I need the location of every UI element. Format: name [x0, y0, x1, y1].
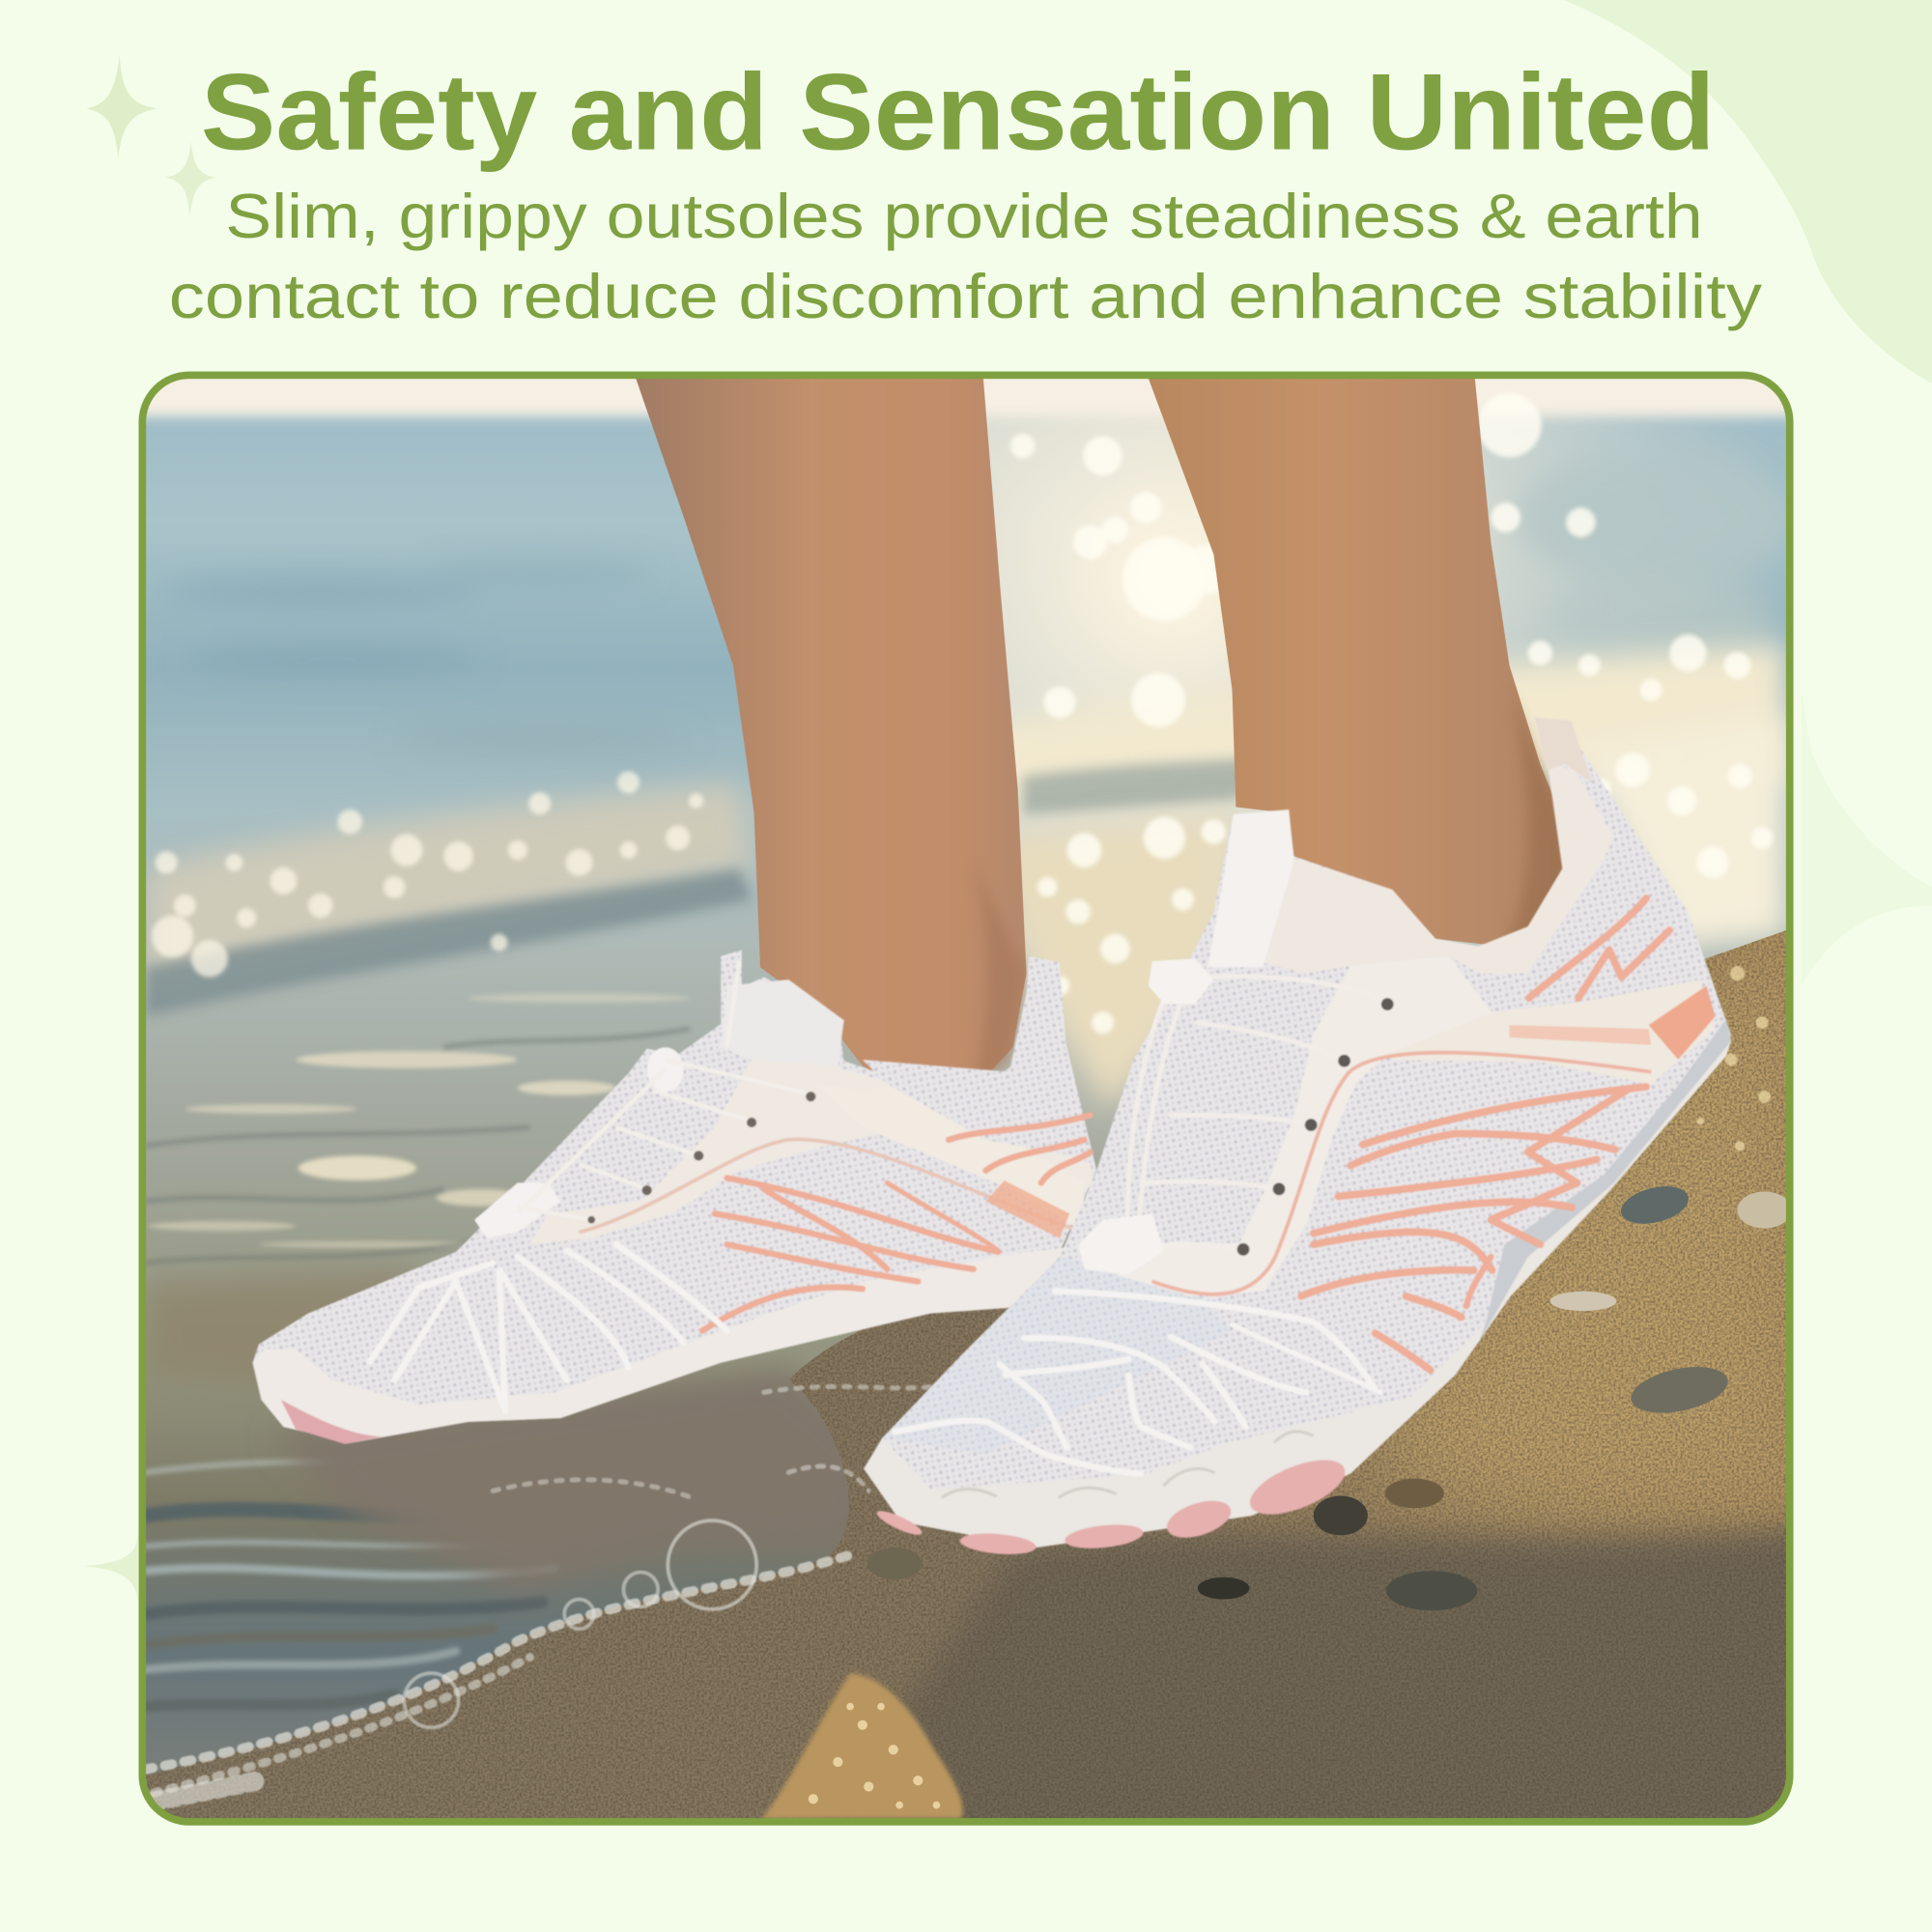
left shoe upper	[252, 950, 1096, 1443]
right shoe toe tint	[882, 1257, 1233, 1454]
right leg ankle shadow	[1503, 690, 1575, 947]
shallow water highlights	[148, 993, 690, 1248]
bright sand on the right	[1355, 936, 1786, 1509]
subtitle: Slim, grippy outsoles provide steadiness & earth	[225, 181, 1703, 251]
right shoe pink trim line	[1152, 1053, 1651, 1294]
pebbles	[867, 1179, 1792, 1610]
right shoe upper	[864, 727, 1731, 1548]
left shoe toggle and laces	[474, 961, 815, 1238]
right shoe rear pull tab	[1534, 717, 1592, 782]
right shoe white toe ribs	[895, 1292, 1380, 1474]
foreground water streaks	[146, 1454, 579, 1707]
right shoe pink heel wedge	[1649, 985, 1716, 1060]
sand grain texture	[146, 924, 1786, 1824]
left leg ankle shadow	[974, 863, 1026, 1091]
left shoe pink ribs	[702, 1115, 1091, 1331]
dark ripple lines in shallows	[146, 1029, 690, 1263]
right shoe grey sidewall	[1479, 1019, 1731, 1343]
sparkle large	[86, 55, 157, 157]
golden sun patch on sand	[761, 1673, 963, 1819]
sand glitter on the right	[1696, 966, 1771, 1151]
sparkle small	[165, 142, 215, 215]
left breaking wave	[146, 771, 754, 1016]
right shoe eyelets	[1237, 998, 1394, 1256]
sand shadow	[788, 1521, 1848, 1873]
sky	[111, 345, 1836, 416]
water ripples	[160, 450, 1786, 750]
right shoe toe bumper ridges	[943, 1432, 1312, 1497]
sparkle behind photo	[84, 1528, 138, 1602]
left shoe toe pad	[281, 1400, 382, 1444]
left shoe white toe ribs	[370, 1244, 727, 1410]
decorative corner blob	[1564, 0, 1932, 384]
decorative lower right blob	[1802, 690, 1932, 985]
photo frame border	[142, 375, 1790, 1822]
left leg	[636, 379, 1026, 1096]
shoe: front right shoe	[864, 717, 1731, 1557]
right shoe laces	[1127, 977, 1387, 1249]
subtitle	[169, 181, 1763, 331]
right leg	[1149, 379, 1575, 947]
subtitle: contact to reduce discomfort and enhance stability	[169, 261, 1763, 331]
left shoe sole	[252, 1247, 1069, 1443]
wet shoreline tint	[146, 1269, 419, 1392]
right surf and glitter	[985, 393, 1786, 1109]
sand	[146, 924, 1786, 1824]
right shoe lace toggles	[1078, 958, 1213, 1275]
right shoe collar	[1257, 764, 1614, 974]
right shoe pink ribs	[1301, 898, 1669, 1370]
right shoe pink toe pads	[874, 1449, 1352, 1557]
wet sand under left shoe	[271, 1368, 887, 1589]
foam line	[146, 1386, 936, 1802]
sea water	[146, 379, 1786, 1825]
shoe: rear left shoe	[252, 950, 1096, 1444]
left shoe pink trim	[579, 1139, 1084, 1233]
right shoe side band	[1387, 980, 1716, 1084]
sun glow on water	[788, 379, 1786, 1240]
left shoe collar and eyestay	[529, 1060, 1096, 1244]
right shoe sole	[864, 1019, 1731, 1548]
right shoe eyestay	[1117, 956, 1492, 1296]
right shoe pull tab	[1208, 810, 1293, 967]
panel: beach photo illustration	[145, 379, 1786, 1818]
title: Safety and Sensation United	[201, 50, 1716, 172]
